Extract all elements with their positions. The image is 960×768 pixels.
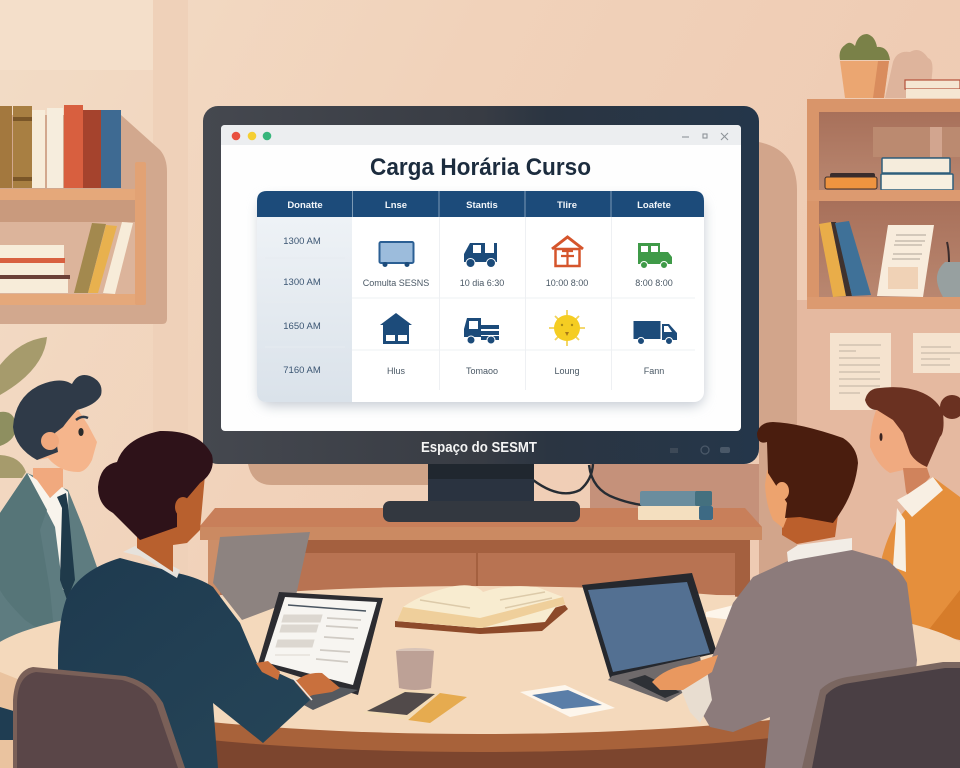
- wall notes: [830, 333, 960, 410]
- potted plant and book on shelf: [840, 34, 960, 98]
- cell labels: 8:00 8:00: [635, 278, 673, 288]
- window buttons: [682, 133, 728, 140]
- icon: yellow sun: [549, 310, 585, 346]
- title: Carga Horária Curso: [370, 154, 591, 181]
- icon: blue house: [380, 313, 412, 344]
- left plant leaves: [0, 337, 47, 478]
- round table: [0, 586, 960, 768]
- monitor: [203, 106, 759, 464]
- blue-screen laptop: [582, 573, 717, 702]
- icon: light blue cart: [380, 242, 414, 267]
- cell labels: 10:00 8:00: [546, 278, 588, 288]
- table header labels: Donatte: [287, 200, 323, 211]
- cell labels: Comulta SESNS: [363, 278, 429, 288]
- browser window: [221, 125, 741, 431]
- window control dots: [232, 132, 271, 140]
- time column: 1300 AM: [283, 236, 321, 247]
- shelf books: [819, 158, 960, 297]
- cell labels: Tomaoo: [466, 366, 498, 376]
- paper on the table: [706, 604, 738, 620]
- books: lower stack: [0, 222, 133, 294]
- left foreground sleeve: [0, 707, 17, 740]
- monitor brand label: Espaço do SESMT: [421, 439, 537, 456]
- icon: blue truck: [464, 242, 497, 268]
- icon: blue flatbed truck: [464, 318, 499, 344]
- table header labels: Stantis: [466, 200, 498, 211]
- time column: 1300 AM: [283, 277, 321, 288]
- time column: [283, 236, 321, 376]
- phone and notebook: [363, 690, 467, 723]
- cables: [533, 464, 642, 505]
- gray-sweater man: [652, 422, 917, 768]
- table header labels: Tlire: [557, 200, 577, 211]
- man on the left: [0, 375, 102, 680]
- table header labels: Lnse: [385, 200, 407, 211]
- time column: 1650 AM: [283, 321, 321, 332]
- books on desk: [638, 491, 713, 520]
- monitor stand: [383, 463, 580, 522]
- table header labels: [287, 200, 671, 211]
- white-screen laptop: [258, 592, 383, 710]
- cell labels: 10 dia 6:30: [460, 278, 504, 288]
- time column: 7160 AM: [283, 365, 321, 376]
- tablet: [520, 685, 615, 717]
- icon: green truck: [638, 243, 672, 268]
- navy-suit man: [58, 431, 340, 768]
- cell labels: Fann: [644, 366, 664, 376]
- cell labels: Loung: [554, 366, 580, 376]
- woman on the right: [865, 387, 960, 640]
- icon: delivery truck: [634, 321, 677, 344]
- desk: [200, 508, 762, 600]
- typing hands: [652, 655, 718, 690]
- hand on laptop: [256, 661, 340, 697]
- cell labels: Hlus: [387, 366, 405, 376]
- gray laptop behind: [213, 532, 310, 620]
- icon: orange house: [552, 237, 583, 266]
- chair right: [802, 662, 960, 768]
- monitor bezel buttons: [670, 446, 730, 454]
- schedule table: [257, 191, 704, 406]
- books: top row: [0, 105, 121, 188]
- cell labels: [363, 278, 673, 376]
- open book: [395, 585, 568, 634]
- right bookshelf: [807, 99, 960, 309]
- table header labels: Loafete: [637, 200, 671, 211]
- cup: [396, 648, 434, 690]
- left bookshelf: [0, 105, 167, 324]
- chair left: [13, 667, 185, 768]
